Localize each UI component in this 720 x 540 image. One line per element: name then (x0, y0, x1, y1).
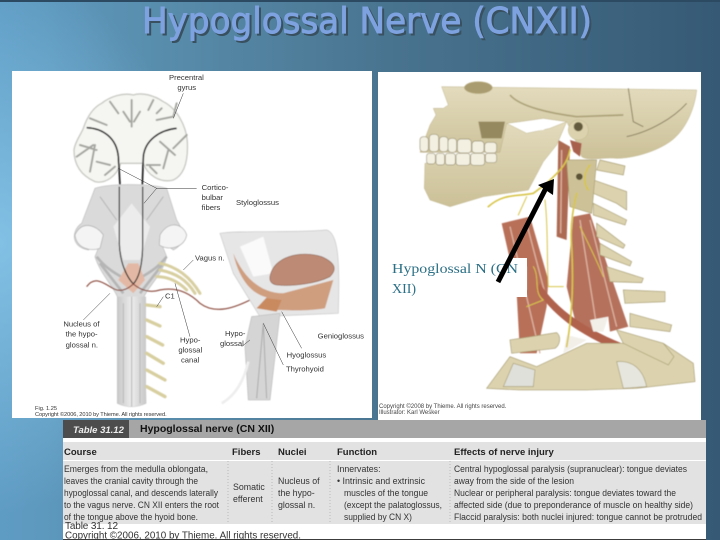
copyright note: Illustrator: Karl Wesker (379, 410, 440, 416)
table title bar: Hypoglossal nerve (CN XII) (140, 423, 274, 435)
column: nuclei: the hypo- (278, 488, 315, 498)
column: nuclei: Nucleus of (278, 476, 320, 486)
skull (420, 82, 697, 207)
anatomy labels: the hypo- (66, 330, 98, 339)
column: course: leaves the cranial cavity through the (64, 476, 198, 486)
column: function: supplied by CN X) (344, 512, 412, 522)
neck muscles (502, 140, 630, 355)
column: course: hypoglossal canal, and descends laterally (64, 488, 219, 498)
column: nuclei (278, 476, 320, 510)
anatomy labels: glossal n. (66, 340, 98, 349)
column: effects of nerve injury: away from the side of the lesion (454, 476, 574, 486)
hypoglossal nerve course (87, 281, 287, 309)
table header row: Course (64, 447, 97, 458)
table caption strip: Table 31. 12 (65, 521, 118, 532)
anatomy labels: Nucleus of (63, 320, 100, 329)
teeth (420, 134, 497, 165)
anatomy labels: Genioglossus (318, 331, 364, 340)
anatomy labels: Hypo- (180, 336, 201, 345)
anatomy labels: Thyrohyoid (286, 365, 324, 374)
anatomy labels: bulbar (202, 193, 223, 202)
copyright note (379, 403, 507, 416)
column: function: Innervates: (337, 464, 381, 474)
anatomy labels: glossal (220, 339, 244, 348)
table header row (64, 447, 554, 458)
column: fibers: Somatic (233, 482, 265, 492)
cervical vertebrae and shoulder (487, 160, 695, 390)
column: function: (except the palatoglossus, (344, 500, 442, 510)
column: effects of nerve injury (454, 464, 702, 522)
callout label box (388, 258, 527, 297)
leader lines (83, 93, 302, 365)
cervical nerve roots (147, 263, 200, 397)
column: effects of nerve injury: Flaccid paralysis: both nuclei injured: tongue cannot be protruded (454, 512, 702, 522)
anatomy labels: Precentral (169, 73, 204, 82)
table header row: Effects of nerve injury (454, 447, 554, 458)
arrow (498, 179, 554, 282)
table title bar (63, 420, 706, 438)
column: course: Emerges from the medulla oblongata, (64, 464, 208, 474)
anatomy labels: Vagus n. (195, 254, 225, 263)
yellow nerves (488, 150, 603, 347)
table title bar: Table 31.12 (73, 425, 125, 436)
anatomy labels: gyrus (177, 83, 196, 92)
column: course: of the tongue above the hyoid bone. (64, 512, 198, 522)
copyright note: Copyright ©2008 by Thieme. All rights reserved. (379, 403, 507, 410)
anatomy labels (35, 73, 364, 418)
column: effects of nerve injury: Central hypoglossal paralysis (supranuclear): tongue deviates (454, 464, 688, 474)
column: course (64, 464, 220, 522)
anatomy labels: Cortico- (202, 183, 229, 192)
anatomy labels: fibers (202, 203, 221, 212)
column: function (337, 464, 442, 522)
anatomy labels: Copyright ©2006, 2010 by Thieme. All rights reserved. (35, 411, 167, 418)
table caption strip (63, 521, 706, 540)
callout: Hypoglossal N label: Hypoglossal N (CN (392, 262, 518, 277)
column: fibers (233, 482, 265, 504)
brain coronal section (74, 94, 187, 185)
column: course: to the vagus nerve. CN XII enters the root (64, 500, 220, 510)
panel: brain and brainstem diagram (12, 71, 372, 418)
anatomy labels: canal (181, 356, 200, 365)
column: nuclei: glossal n. (278, 500, 315, 510)
anatomy labels: Hyoglossus (287, 350, 326, 359)
panel: neck anatomy illustration (378, 72, 701, 422)
anatomy labels: Styloglossus (236, 198, 279, 207)
tongue and muscles (220, 230, 339, 403)
table header row: Nuclei (278, 447, 307, 458)
column: effects of nerve injury: Nuclear or peripheral paralysis: tongue deviates toward the (454, 488, 676, 498)
brainstem (74, 185, 187, 407)
anatomy labels: C1 (165, 291, 175, 300)
panel: nerve table (63, 420, 706, 540)
anatomy labels: Hypo- (225, 329, 246, 338)
callout: Hypoglossal N label: XII) (392, 282, 416, 297)
column: function: muscles of the tongue (344, 488, 428, 498)
column: effects of nerve injury: affected side (due to preponderance of muscle on healthy side) (454, 500, 693, 510)
anatomy labels: Fig. 1.25 (35, 406, 57, 412)
column: fibers: efferent (233, 494, 263, 504)
anatomy labels: glossal (178, 346, 202, 355)
table header row: Fibers (232, 447, 261, 458)
table header row: Function (337, 447, 377, 458)
title: Hypoglossal Nerve (CNXII) (142, 1, 592, 42)
column: function: • Intrinsic and extrinsic (337, 476, 426, 486)
